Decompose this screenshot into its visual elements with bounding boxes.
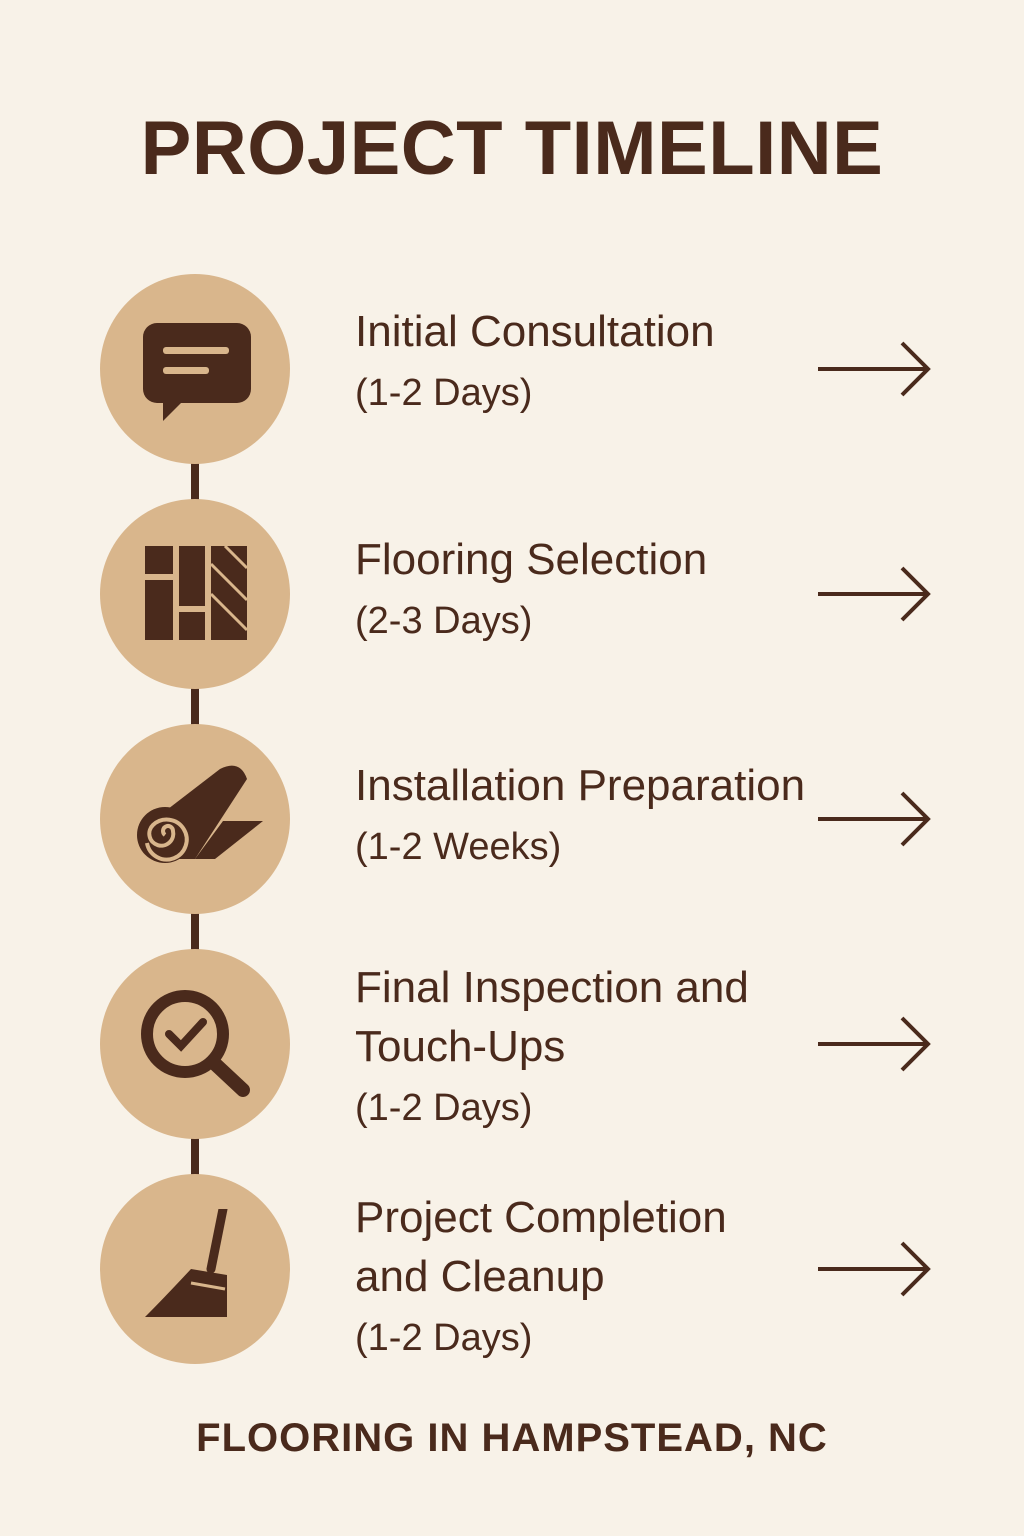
arrow 1 bbox=[818, 342, 931, 396]
step 5 text bbox=[355, 1193, 727, 1359]
step 4 text bbox=[355, 963, 749, 1129]
step 4 text: (1-2 Days) bbox=[355, 1087, 532, 1129]
step 3 text bbox=[355, 761, 805, 868]
arrow 2 bbox=[818, 566, 931, 622]
arrow 3 bbox=[818, 792, 931, 846]
step 2 text: (2-3 Days) bbox=[355, 600, 532, 642]
step 1 icon: chat bubble bbox=[100, 274, 290, 464]
step 5 text: (1-2 Days) bbox=[355, 1317, 532, 1359]
step 5 text: and Cleanup bbox=[355, 1252, 605, 1301]
step 2 text: Flooring Selection bbox=[355, 535, 707, 584]
step 5 text: Project Completion bbox=[355, 1193, 727, 1242]
footer: FLOORING IN HAMPSTEAD, NC bbox=[196, 1416, 828, 1460]
arrow 4 bbox=[818, 1016, 931, 1072]
step 4 icon: magnifier check bbox=[100, 949, 290, 1139]
title: PROJECT TIMELINE bbox=[141, 106, 883, 191]
step 4 text: Touch-Ups bbox=[355, 1022, 565, 1071]
arrow 5 bbox=[818, 1242, 931, 1296]
step 5 icon: broom bbox=[100, 1174, 290, 1364]
step 4 text: Final Inspection and bbox=[355, 963, 749, 1012]
step 2 icon: flooring tiles bbox=[100, 499, 290, 689]
step 1 text: (1-2 Days) bbox=[355, 372, 532, 414]
step 3 text: (1-2 Weeks) bbox=[355, 826, 561, 868]
step 1 text: Initial Consultation bbox=[355, 307, 715, 356]
step 1 text bbox=[355, 307, 715, 414]
step 3 text: Installation Preparation bbox=[355, 761, 805, 810]
step 2 text bbox=[355, 535, 707, 642]
step 3 icon: carpet roll bbox=[100, 724, 290, 914]
